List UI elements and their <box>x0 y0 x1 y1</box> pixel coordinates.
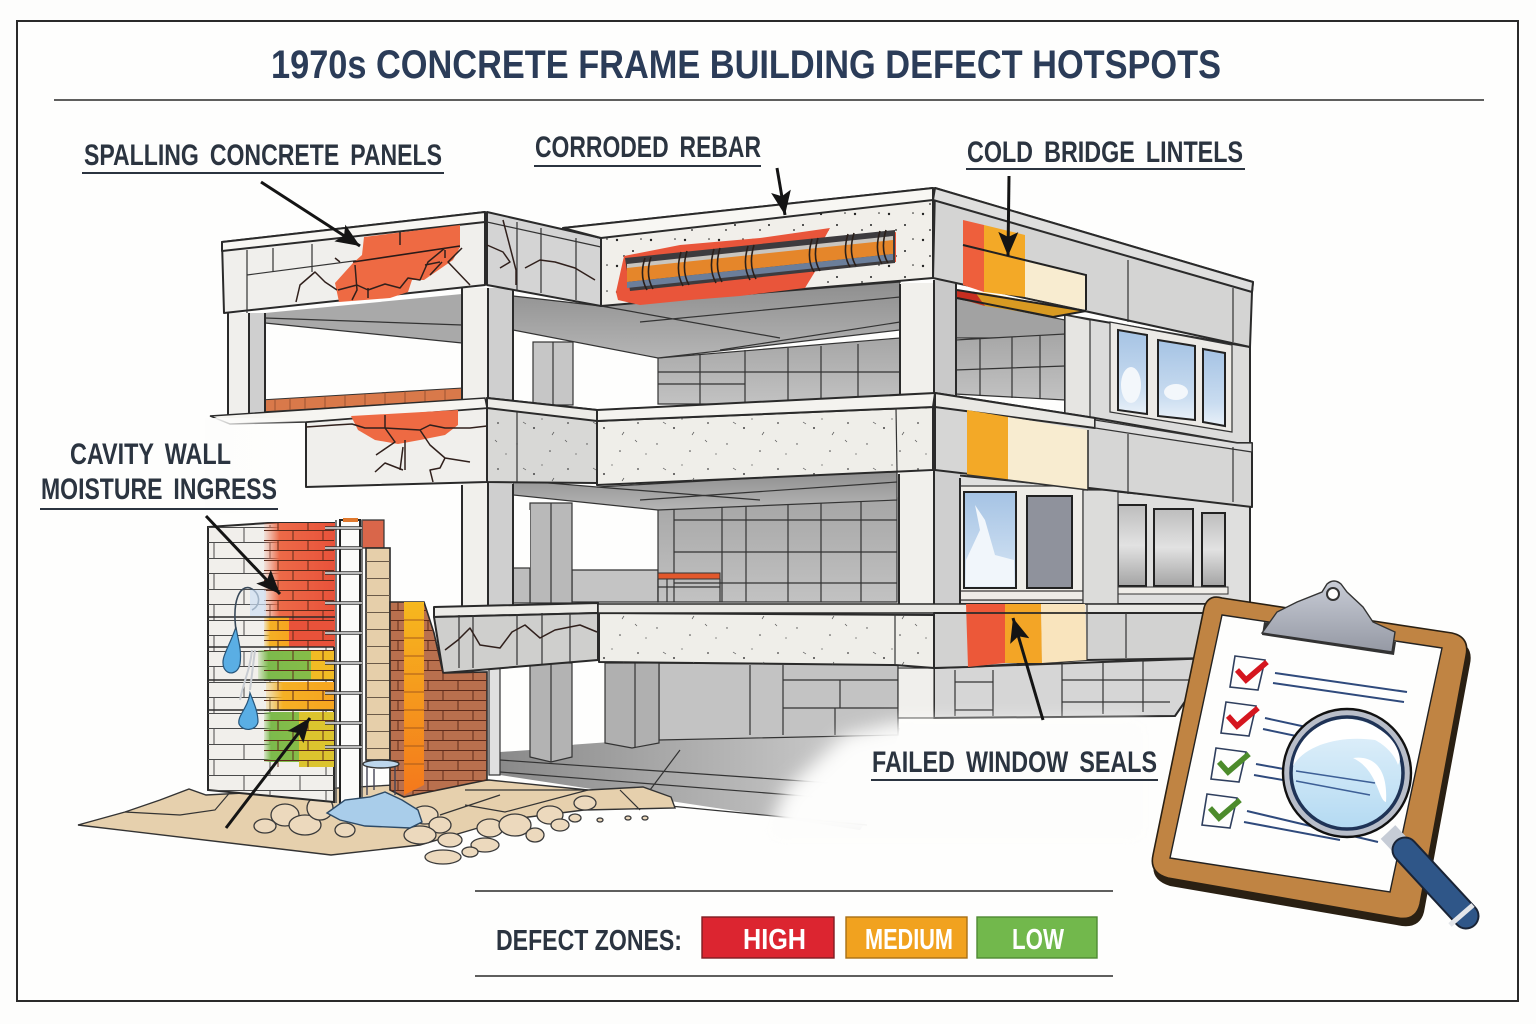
water pool <box>327 792 422 828</box>
lower floor band right <box>934 604 1215 668</box>
lower floor band centre <box>598 604 1215 668</box>
corroded rebar exposure <box>616 228 896 305</box>
rubble stones <box>254 796 648 864</box>
cold bridge hotspot middle <box>967 410 1088 490</box>
title: 1970s CONCRETE FRAME BUILDING DEFECT HOTSPOTS <box>271 43 1221 87</box>
middle floor band side and centre <box>487 393 935 485</box>
top storey interior <box>265 282 1065 405</box>
upper right windows <box>1118 330 1225 426</box>
label: failed window seals: FAILED WINDOW SEALS <box>872 746 1157 779</box>
label: failed window seals <box>871 618 1158 780</box>
top floor right facade band <box>933 188 1253 347</box>
red check marks <box>1228 662 1267 726</box>
second storey interior <box>513 470 897 603</box>
failed window <box>959 492 1083 600</box>
corroded rebar centre beam <box>563 188 933 306</box>
right second storey wall with windows <box>955 475 1250 604</box>
mask fading ground storey near label <box>765 722 1145 840</box>
label: corroded rebar: CORRODED REBAR <box>535 131 761 164</box>
label: corroded rebar <box>534 131 785 215</box>
legend: low: LOW <box>1012 924 1064 956</box>
cold bridge lintel hotspot <box>957 220 1086 317</box>
label: spalling concrete panels <box>82 139 444 246</box>
label: cold bridge lintels: COLD BRIDGE LINTELS <box>967 136 1243 169</box>
moisture zones on bricks <box>208 523 335 767</box>
failed window seal hotspot <box>966 604 1087 667</box>
top floor beam: left wing front <box>222 212 485 313</box>
orange parapet panel <box>260 388 462 412</box>
checklist items <box>1202 656 1407 842</box>
legend: high <box>702 917 834 958</box>
legend: medium: MEDIUM <box>865 924 953 956</box>
ground storey <box>489 658 1215 830</box>
small stool <box>363 760 399 795</box>
metal clip <box>1262 581 1396 655</box>
label: cavity wall moisture ingress <box>40 438 310 828</box>
concrete frame building <box>210 188 1253 830</box>
mask fading band near cavity label <box>205 418 305 513</box>
water leak drips <box>223 588 266 729</box>
legend: high: HIGH <box>743 924 806 956</box>
spalling hotspot middle <box>306 410 487 482</box>
exposed brick and orange strip <box>390 602 487 797</box>
green check marks <box>1210 754 1249 818</box>
magnifying glass <box>1283 709 1473 925</box>
wall ties and cavity column <box>325 518 362 804</box>
middle floor band right <box>935 393 1252 507</box>
legend: defect zones: DEFECT ZONES: <box>496 925 682 957</box>
tan block inner leaf <box>366 548 390 760</box>
label: cavity wall moisture ingress: MOISTURE INGRESS <box>41 473 277 506</box>
text lines <box>1244 673 1407 842</box>
orange bench <box>658 573 720 602</box>
label: cavity wall moisture ingress: CAVITY WALL <box>70 438 231 471</box>
clipboard with checklist <box>1152 581 1473 926</box>
right facade wall with upper windows <box>1065 315 1250 450</box>
outer block leaf <box>208 523 334 802</box>
legend: defect zones <box>475 891 1113 976</box>
back red brick <box>362 520 384 548</box>
middle floor band left <box>210 398 487 487</box>
columns <box>228 280 1118 608</box>
legend: medium <box>846 917 967 958</box>
legend: low <box>977 917 1097 958</box>
cavity wall section <box>208 518 487 828</box>
ground and rubble <box>78 780 675 864</box>
right grey windows <box>1118 505 1228 594</box>
lower floor band left <box>434 603 598 673</box>
label: spalling concrete panels: SPALLING CONCRETE PANELS <box>84 139 442 172</box>
spalling hotspot top <box>296 225 470 302</box>
paper <box>1170 615 1442 892</box>
clipboard board <box>1152 597 1471 926</box>
top floor beam: left wing side <box>487 212 601 306</box>
